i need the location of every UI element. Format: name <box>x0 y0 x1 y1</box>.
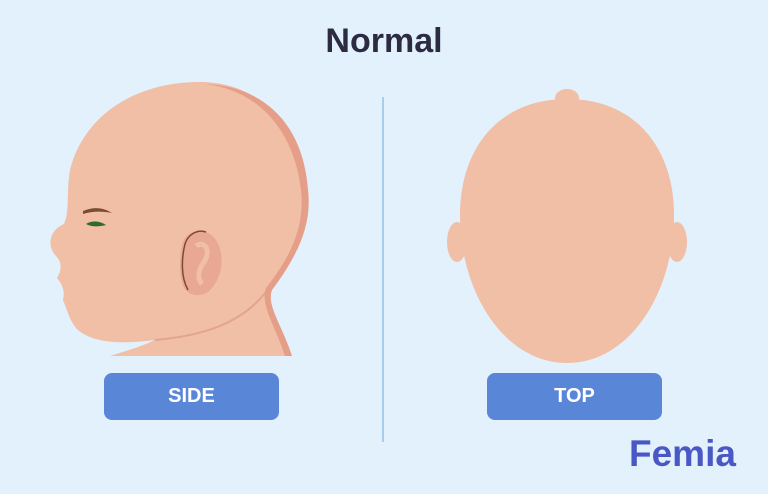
button: side <box>104 373 279 420</box>
title: Normal <box>325 22 443 60</box>
logo: Femia <box>629 433 736 474</box>
eyebrow <box>83 208 112 214</box>
ear <box>180 231 222 295</box>
button: side: SIDE <box>168 385 215 407</box>
divider line <box>382 97 384 442</box>
button: top <box>487 373 662 420</box>
illustration: top view head <box>447 89 687 363</box>
button: top: TOP <box>554 385 595 407</box>
eye <box>86 221 106 226</box>
